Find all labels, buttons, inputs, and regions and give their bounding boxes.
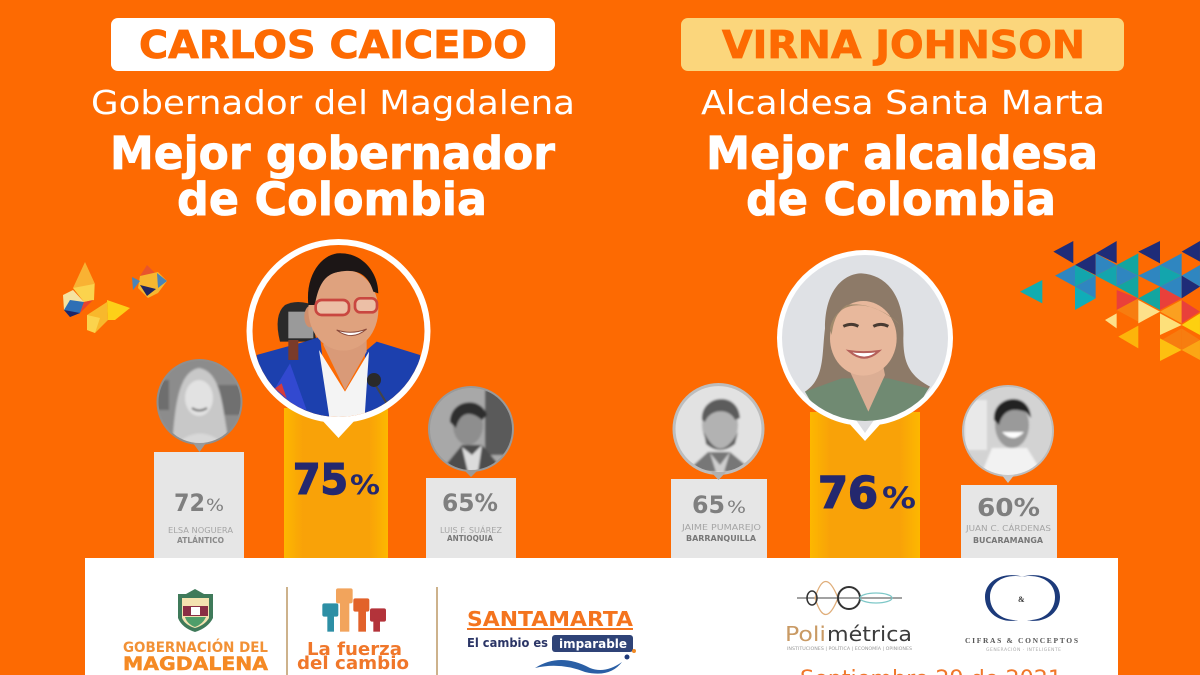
logo: Gobernación del Magdalena	[123, 589, 269, 675]
bar: Juan C. Cárdenas 60%: JUAN C. CÁRDENAS	[965, 524, 1051, 533]
logo: Cifras & Conceptos: &	[1018, 595, 1025, 604]
logo: Polimétrica: Poli	[785, 622, 826, 646]
panel: Carlos Caicedo heading	[91, 18, 575, 226]
logo: Santa Marta: imparable	[559, 637, 627, 651]
bar: Virna Johnson 76%: %	[882, 481, 916, 515]
bar chart: mayors	[671, 250, 1057, 558]
panel: footer logos	[85, 558, 1118, 675]
subtitle: Alcaldesa Santa Marta: Alcaldesa Santa Marta	[701, 83, 1105, 122]
logo: La fuerza del cambio	[297, 588, 409, 674]
panel: Virna Johnson heading	[681, 18, 1124, 226]
bar: Jaime Pumarejo 65%: %	[727, 498, 746, 518]
bar: Elsa Noguera 72%: 72	[174, 489, 205, 517]
bar: Jaime Pumarejo 65%: JAIME PUMAREJO	[681, 523, 761, 532]
headline: Mejor alcaldesa de Colombia: de Colombia	[746, 173, 1056, 226]
bar: Virna Johnson 76%	[810, 412, 920, 558]
photo: Virna Johnson	[777, 250, 953, 441]
photo: Jaime Pumarejo	[672, 383, 766, 480]
bar: Elsa Noguera 72%: ELSA NOGUERA	[168, 526, 234, 535]
logo: Cifras & Conceptos: CIFRAS & CONCEPTOS	[965, 636, 1078, 645]
logo: La fuerza del cambio: del cambio	[297, 653, 409, 674]
name pill: Carlos Caicedo: CARLOS CAICEDO	[139, 23, 527, 67]
divider	[286, 587, 288, 675]
bar: Juan C. Cárdenas 60%	[961, 485, 1057, 558]
photo: Carlos Caicedo	[246, 239, 430, 438]
bar: Jaime Pumarejo 65%: 65	[692, 491, 725, 519]
logo: Polimétrica	[785, 582, 912, 652]
logo: Gobernación del Magdalena: GOBERNACIÓN DEL	[123, 638, 268, 656]
logo: Gobernación del Magdalena: MAGDALENA	[123, 654, 269, 675]
logo: Cifras & Conceptos	[965, 575, 1078, 653]
photo: Luis F. Suárez	[425, 385, 515, 477]
name pill: Virna Johnson	[681, 18, 1124, 71]
logo: La fuerza del cambio: La fuerza	[307, 639, 402, 660]
logo: Polimétrica: métrica	[827, 622, 912, 646]
bar: Carlos Caicedo 75%	[284, 408, 388, 558]
bar: Luis F. Suárez 65%	[426, 478, 516, 558]
bar: Jaime Pumarejo 65%	[671, 479, 767, 558]
bar: Virna Johnson 76%: 76	[818, 468, 878, 519]
bar: Juan C. Cárdenas 60%: 60%	[977, 493, 1040, 522]
photo: Elsa Noguera	[155, 358, 245, 452]
bar: Elsa Noguera 72%	[154, 452, 244, 558]
bar: Elsa Noguera 72%: %	[206, 496, 224, 516]
icon: origami butterfly	[63, 262, 167, 333]
name pill: Carlos Caicedo	[111, 18, 555, 71]
logo: Cifras & Conceptos: GENERACIÓN · INTELIGENTE	[986, 646, 1061, 653]
logo: Santa Marta: El cambio es	[467, 636, 548, 650]
bar: Luis F. Suárez 65%: ANTIOQUIA	[447, 534, 493, 543]
bar: Juan C. Cárdenas 60%: BUCARAMANGA	[973, 536, 1043, 545]
name pill: Virna Johnson: VIRNA JOHNSON	[722, 23, 1085, 67]
bar: Jaime Pumarejo 65%: BARRANQUILLA	[686, 534, 756, 543]
divider	[436, 587, 438, 675]
bar: Carlos Caicedo 75%: 75	[293, 455, 348, 504]
logo: Santa Marta	[467, 607, 636, 674]
headline: Mejor alcaldesa de Colombia	[706, 127, 1098, 226]
bar: Carlos Caicedo 75%: %	[350, 470, 380, 501]
logo: Polimétrica: INSTITUCIONES | POLÍTICA | ECONOMÍA | OPINIONES	[787, 645, 912, 652]
subtitle: Gobernador del Magdalena: Gobernador del Magdalena	[91, 83, 575, 122]
headline: Mejor gobernador de Colombia: Mejor gobernador	[110, 127, 556, 180]
bar: Luis F. Suárez 65%: 65%	[442, 489, 498, 517]
photo: Juan C. Cárdenas	[962, 385, 1056, 483]
headline: Mejor gobernador de Colombia: de Colombia	[177, 173, 487, 226]
logo: Santa Marta: SANTAMARTA	[467, 607, 634, 631]
bar: Luis F. Suárez 65%: LUIS F. SUÁREZ	[440, 526, 502, 535]
headline: Mejor alcaldesa de Colombia: Mejor alcaldesa	[706, 127, 1098, 180]
icon: geometric triangle pattern	[1020, 241, 1200, 361]
bar chart: governors	[154, 239, 516, 558]
headline: Mejor gobernador de Colombia	[110, 127, 556, 226]
bar: Elsa Noguera 72%: ATLÁNTICO	[177, 536, 224, 545]
